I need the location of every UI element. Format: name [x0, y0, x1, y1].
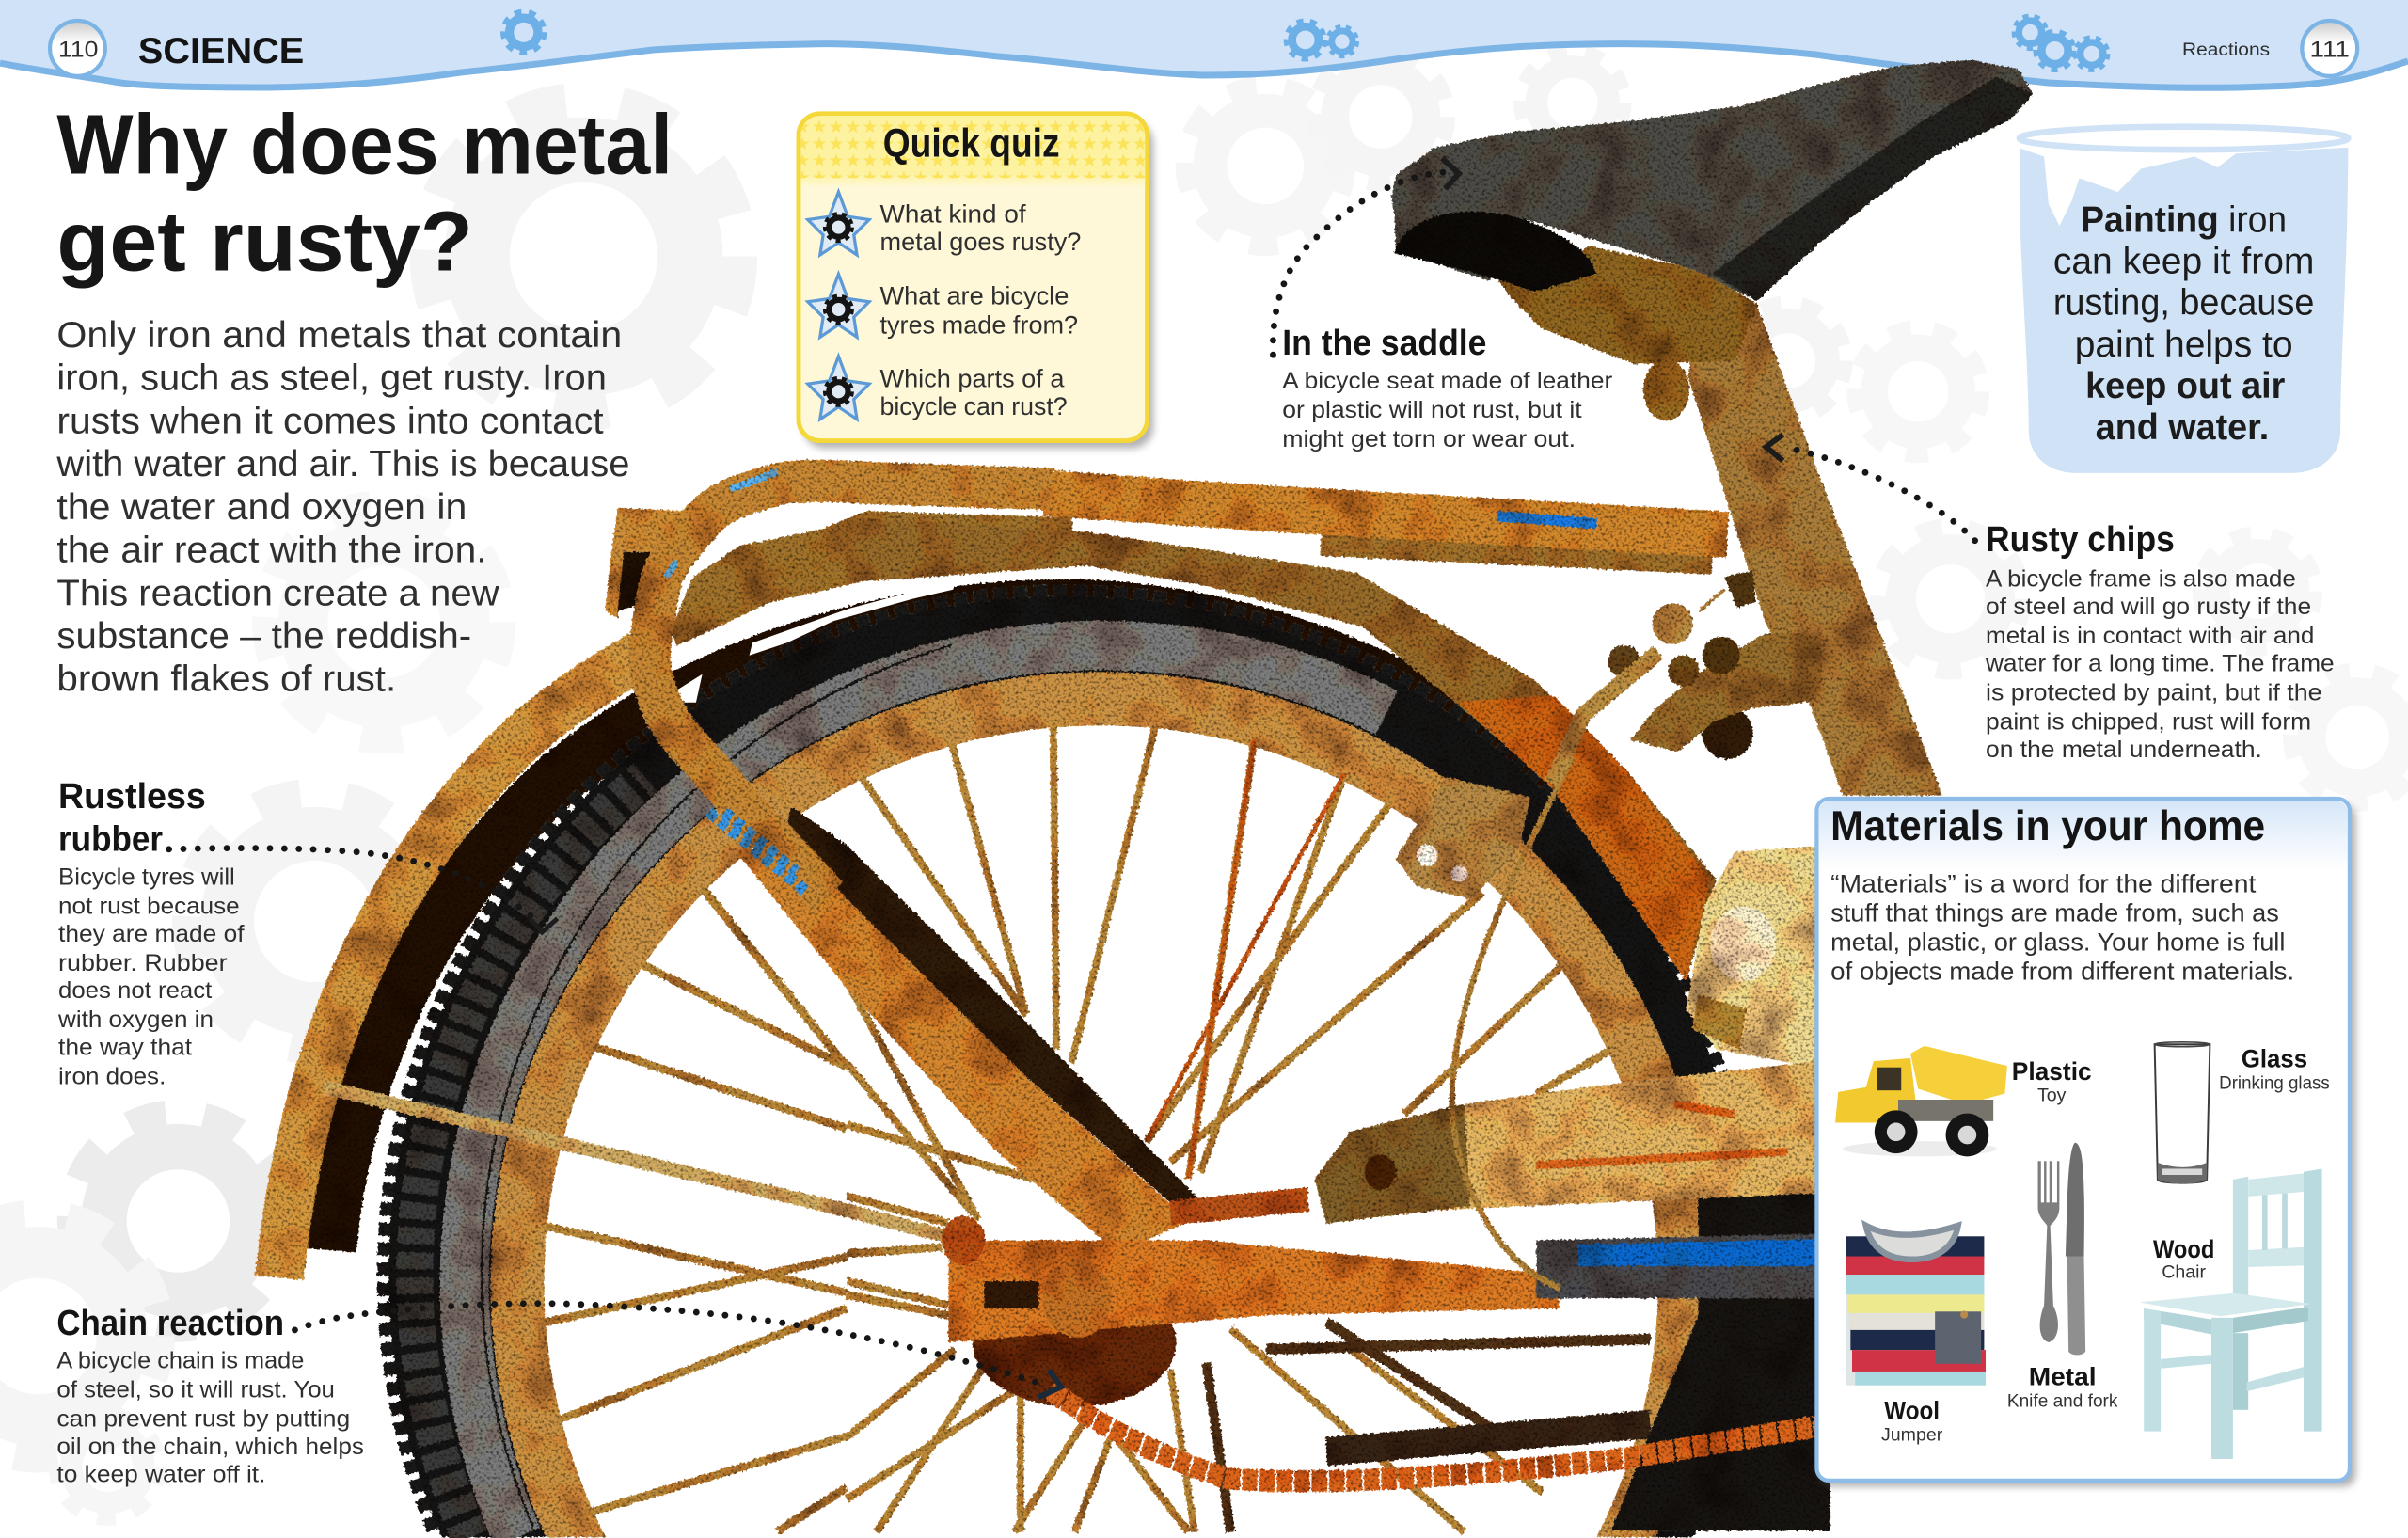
text block: rusty chips: metal is in contact with air and	[1986, 623, 2314, 649]
intro paragraph: with water and air. This is because	[55, 444, 629, 484]
label: metal: Knife and fork	[2007, 1391, 2118, 1412]
text block: rustless rubber: not rust because	[58, 893, 240, 919]
text block: chain reaction: can prevent rust by putting	[56, 1406, 350, 1433]
saddle	[1391, 60, 2034, 301]
title	[56, 98, 673, 289]
intro paragraph: brown flakes of rust.	[56, 659, 396, 700]
arrow: tyre pointer	[530, 918, 558, 932]
text block: chain reaction: Chain reaction	[56, 1303, 284, 1342]
text block: rustless rubber: Rustless	[58, 776, 206, 816]
rack end bracket	[605, 508, 693, 618]
paint can callout: Painting iron	[2081, 200, 2287, 241]
label: plastic	[2012, 1057, 2092, 1106]
fender band	[671, 511, 1072, 646]
text block: chain reaction: of steel, so it will rust. You	[56, 1377, 335, 1403]
brake cable	[1452, 756, 1573, 1288]
chainstay tube	[948, 1241, 1560, 1342]
label: wood: Wood	[2153, 1235, 2214, 1263]
text block: chain reaction	[56, 1303, 364, 1488]
materials heading: Materials in your home	[1830, 803, 2265, 849]
question 3	[880, 364, 1068, 420]
text block: rustless rubber: the way that	[58, 1035, 192, 1061]
label: wood: Chair	[2162, 1261, 2206, 1282]
intro paragraph	[55, 315, 629, 700]
rack blue paint	[1497, 516, 1597, 524]
callout dots: rustless rubber	[169, 848, 537, 922]
text block: in the saddle: A bicycle seat made of leather	[1282, 368, 1612, 394]
text block: rusty chips: paint is chipped, rust will form	[1986, 709, 2311, 736]
materials paragraph: stuff that things are made from, such as	[1830, 899, 2279, 928]
sprocket	[973, 1277, 1177, 1407]
materials paragraph	[1830, 870, 2294, 986]
callout dots: chain reaction	[294, 1304, 1041, 1384]
page number right	[2302, 21, 2357, 76]
text block: rustless rubber: with oxygen in	[57, 1007, 214, 1033]
text block: rustless rubber: rubber. Rubber	[58, 950, 228, 976]
title: Why does metal	[56, 98, 673, 192]
question 1: What kind of	[880, 200, 1026, 229]
icon: jumper	[1846, 1226, 1986, 1386]
icon: header gears right	[2014, 16, 2108, 70]
question 3: Which parts of a	[880, 364, 1064, 392]
spokes	[540, 726, 1650, 1532]
wheel rim	[491, 672, 1712, 1537]
paint can callout	[2018, 127, 2348, 473]
icon: header gears middle	[1287, 21, 1357, 59]
label: metal	[2007, 1363, 2118, 1412]
panel: materials in your home	[1816, 799, 2355, 1486]
paint can callout: rusting, because	[2053, 283, 2314, 324]
section label: science: SCIENCE	[138, 31, 304, 71]
loop blue paint	[666, 472, 778, 577]
question 2: What are bicycle	[880, 281, 1069, 309]
text block: in the saddle: might get torn or wear out.	[1282, 426, 1576, 452]
wheel interior	[545, 726, 1657, 1537]
lower rack rail	[1321, 544, 1712, 563]
question 1: metal goes rusty?	[880, 228, 1081, 256]
text block: rustless rubber: they are made of	[58, 921, 246, 947]
text block: rusty chips: of steel and will go rusty if the	[1986, 594, 2311, 620]
paint can callout: can keep it from	[2053, 242, 2314, 282]
intro paragraph: the air react with the iron.	[56, 531, 487, 571]
upper chain	[1170, 1199, 1308, 1213]
text block: in the saddle: In the saddle	[1282, 323, 1486, 362]
gaps between mudguard and tyre	[677, 580, 957, 703]
brake bracket	[1395, 777, 1530, 899]
callout dots: saddle	[1273, 172, 1447, 355]
rear tyre	[384, 592, 1751, 1537]
text block: rusty chips: Rusty chips	[1986, 519, 2175, 559]
quiz heading: Quick quiz	[883, 121, 1060, 166]
icon: chair	[2139, 1168, 2322, 1459]
text block: rusty chips: A bicycle frame is also made	[1986, 566, 2296, 593]
intro paragraph: This reaction create a new	[56, 573, 499, 613]
mudguard left	[279, 607, 1628, 1277]
label: wool	[1881, 1397, 1943, 1445]
text block: chain reaction: to keep water off it.	[56, 1462, 265, 1488]
icon: drinking glass	[2155, 1042, 2210, 1184]
reflector	[1687, 845, 1830, 1070]
text block: rustless rubber: Bicycle tyres will	[58, 864, 235, 890]
materials paragraph: metal, plastic, or glass. Your home is full	[1830, 928, 2285, 957]
label: plastic: Plastic	[2012, 1057, 2092, 1086]
icon: knife and fork	[2038, 1143, 2085, 1355]
paint can callout: paint helps to	[2075, 325, 2293, 365]
question 2	[880, 281, 1078, 339]
arrow: chain pointer	[1038, 1370, 1061, 1398]
text block: rusty chips: on the metal underneath.	[1986, 737, 2262, 763]
label: glass	[2219, 1045, 2330, 1094]
text block: rusty chips	[1985, 519, 2335, 763]
blue tube	[1536, 1233, 1830, 1298]
intro paragraph: Only iron and metals that contain	[56, 315, 622, 356]
icon: quiz star 3	[808, 357, 869, 420]
text block: in the saddle	[1282, 323, 1612, 452]
text block: in the saddle: or plastic will not rust, but it	[1282, 397, 1582, 423]
label: metal: Metal	[2029, 1363, 2097, 1391]
label: glass: Drinking glass	[2219, 1073, 2330, 1094]
title: get rusty?	[56, 195, 473, 289]
paint can callout: and water.	[2096, 407, 2269, 448]
text block: rusty chips: water for a long time. The frame	[1985, 650, 2335, 676]
page number left	[50, 21, 105, 76]
arrow: saddle pointer	[1442, 158, 1459, 189]
stay rod	[324, 1087, 946, 1236]
text block: chain reaction: oil on the chain, which helps	[56, 1434, 364, 1460]
dark tyre lower right	[1611, 1193, 1830, 1530]
seat clamp	[1465, 232, 1757, 364]
text block: rustless rubber	[57, 776, 246, 1090]
lower frame arm and bolts	[1552, 571, 1821, 784]
materials paragraph: “Materials” is a word for the different	[1830, 870, 2257, 898]
frame and rack	[324, 232, 1942, 1530]
label: wool: Jumper	[1881, 1424, 1943, 1445]
page number right: 111	[2310, 37, 2350, 62]
label: wood	[2153, 1235, 2214, 1282]
label: wool: Wool	[1884, 1397, 1940, 1425]
text block: rustless rubber: iron does.	[58, 1064, 166, 1090]
callout dots: rusty chips	[1789, 449, 1975, 541]
question 3: bicycle can rust?	[880, 392, 1068, 420]
icon: header gear left	[503, 12, 544, 53]
mudguard top and right section	[847, 518, 1717, 981]
text block: chain reaction: A bicycle chain is made	[56, 1348, 304, 1374]
text block: rustless rubber: rubber	[58, 818, 163, 858]
paint can callout: keep out air	[2085, 366, 2285, 406]
icon: quiz star 1	[808, 192, 869, 255]
icon: toy truck	[1835, 1046, 2007, 1156]
page number left: 110	[58, 37, 98, 62]
panel: quick quiz	[799, 114, 1153, 449]
arrow: frame pointer	[1766, 435, 1783, 461]
icon: quiz star 2	[808, 274, 869, 337]
question 1	[880, 200, 1081, 256]
label: plastic: Toy	[2037, 1086, 2067, 1106]
hub nuts	[942, 1215, 985, 1265]
materials paragraph: of objects made from different materials.	[1830, 958, 2294, 986]
text block: rustless rubber: does not react	[58, 977, 212, 1004]
text block: rusty chips: is protected by paint, but if the	[1986, 679, 2322, 706]
label: glass: Glass	[2242, 1045, 2307, 1073]
bicycle photo	[279, 60, 2034, 1537]
top rack rail	[1044, 493, 1728, 534]
header band	[0, 0, 2408, 87]
question 2: tyres made from?	[880, 310, 1078, 339]
intro paragraph: substance – the reddish-	[56, 616, 471, 657]
intro paragraph: the water and oxygen in	[56, 487, 467, 528]
intro paragraph: rusts when it comes into contact	[56, 401, 604, 441]
dark strut edge	[784, 806, 1199, 1213]
chainguard	[1314, 1060, 1830, 1223]
section label: reactions: Reactions	[2182, 40, 2270, 60]
loop and fender band	[605, 472, 1072, 896]
seat bolt	[1643, 359, 1689, 420]
intro paragraph: iron, such as steel, get rusty. Iron	[56, 358, 607, 399]
lower strut	[734, 849, 1190, 1252]
loop tube	[649, 481, 1054, 896]
seat post	[1687, 274, 1942, 796]
chain	[1051, 1390, 1830, 1482]
